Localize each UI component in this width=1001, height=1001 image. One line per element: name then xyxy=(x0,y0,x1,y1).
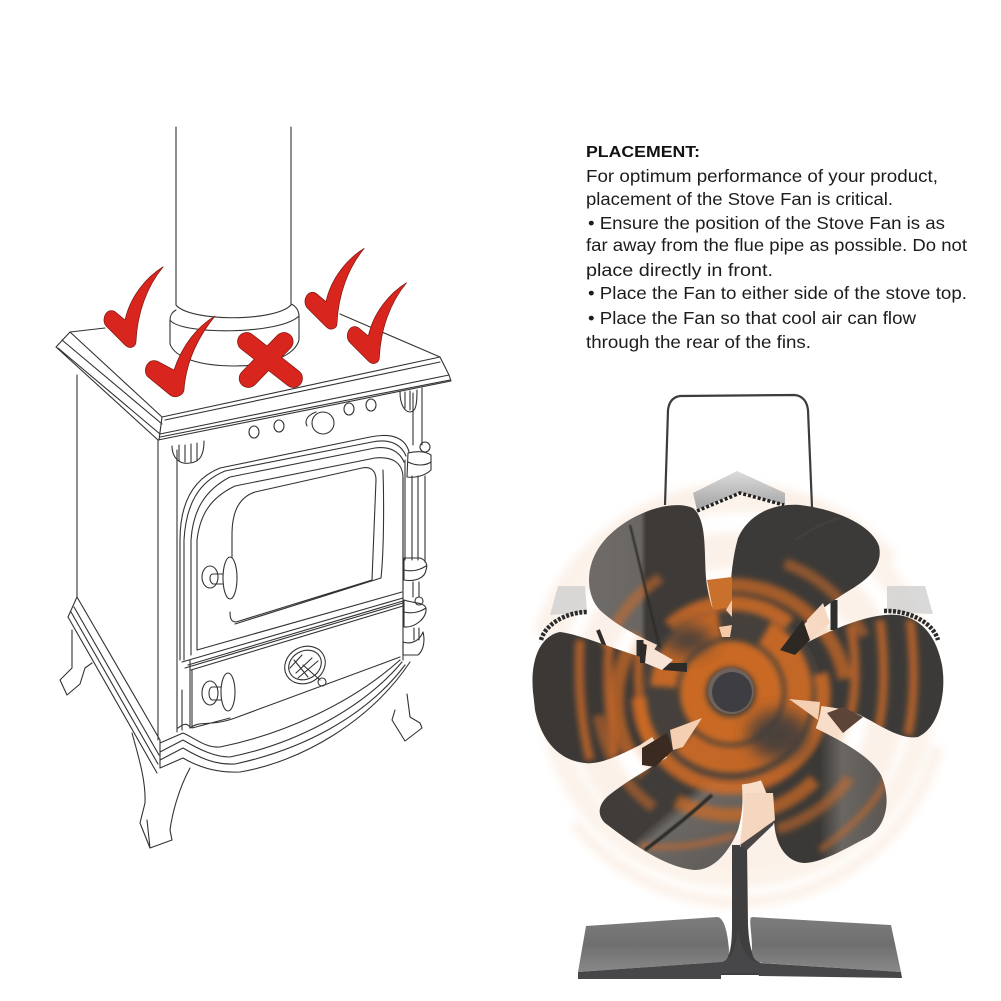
drawer handle xyxy=(202,673,235,711)
fan hub xyxy=(708,668,754,714)
motion halo xyxy=(472,430,1001,960)
base moulding xyxy=(68,597,410,773)
paragraph: • Place the Fan to either side of the stove top. xyxy=(588,283,967,303)
paragraph: through the rear of the fins. xyxy=(586,332,811,352)
firebox door xyxy=(180,435,409,660)
heading: PLACEMENT: xyxy=(586,144,700,161)
stove leg right xyxy=(392,694,422,741)
top heat sink xyxy=(693,471,785,511)
paragraph: • Place the Fan so that cool air can flow xyxy=(588,308,916,328)
check mark back right xyxy=(305,248,364,329)
check mark near left xyxy=(145,316,215,397)
placement marks xyxy=(104,248,407,397)
hinges xyxy=(403,442,431,660)
stand base xyxy=(578,917,902,979)
door handle xyxy=(202,557,237,599)
paragraph: place directly in front. xyxy=(586,260,773,280)
flue collar xyxy=(170,304,299,366)
flue pipe xyxy=(176,127,291,318)
paragraph: far away from the flue pipe as possible. Do not xyxy=(586,235,967,255)
divider rail xyxy=(182,598,403,670)
stove leg front xyxy=(132,733,190,848)
dark swirl patches xyxy=(664,626,808,759)
drawer ornament xyxy=(278,639,332,691)
infographic canvas xyxy=(55,126,967,979)
carry handle xyxy=(665,395,812,507)
cross mark xyxy=(247,342,293,378)
paragraph: • Ensure the position of the Stove Fan is as xyxy=(588,213,945,233)
check mark far left xyxy=(104,267,163,347)
inner frame struts xyxy=(598,600,834,665)
lower drawer xyxy=(178,657,400,728)
right fin pack xyxy=(884,586,938,640)
stove leg left xyxy=(60,630,92,695)
stand stem xyxy=(712,845,770,975)
stove top plate xyxy=(56,314,451,440)
gaps between blades xyxy=(640,577,863,850)
blade creases xyxy=(630,518,840,850)
stove fan product photo xyxy=(532,394,944,979)
paragraph: For optimum performance of your product, xyxy=(586,166,938,186)
stove line drawing xyxy=(56,127,451,848)
door window xyxy=(230,468,384,624)
paragraph: placement of the Stove Fan is critical. xyxy=(586,189,893,209)
orange motion swirl xyxy=(571,556,922,854)
stove body xyxy=(77,375,422,740)
check mark front right xyxy=(347,283,407,363)
paragraph xyxy=(586,166,967,352)
trim studs and knob xyxy=(172,390,417,463)
left fin pack xyxy=(541,586,588,640)
placement text block xyxy=(586,144,967,352)
fan blades xyxy=(532,505,943,870)
